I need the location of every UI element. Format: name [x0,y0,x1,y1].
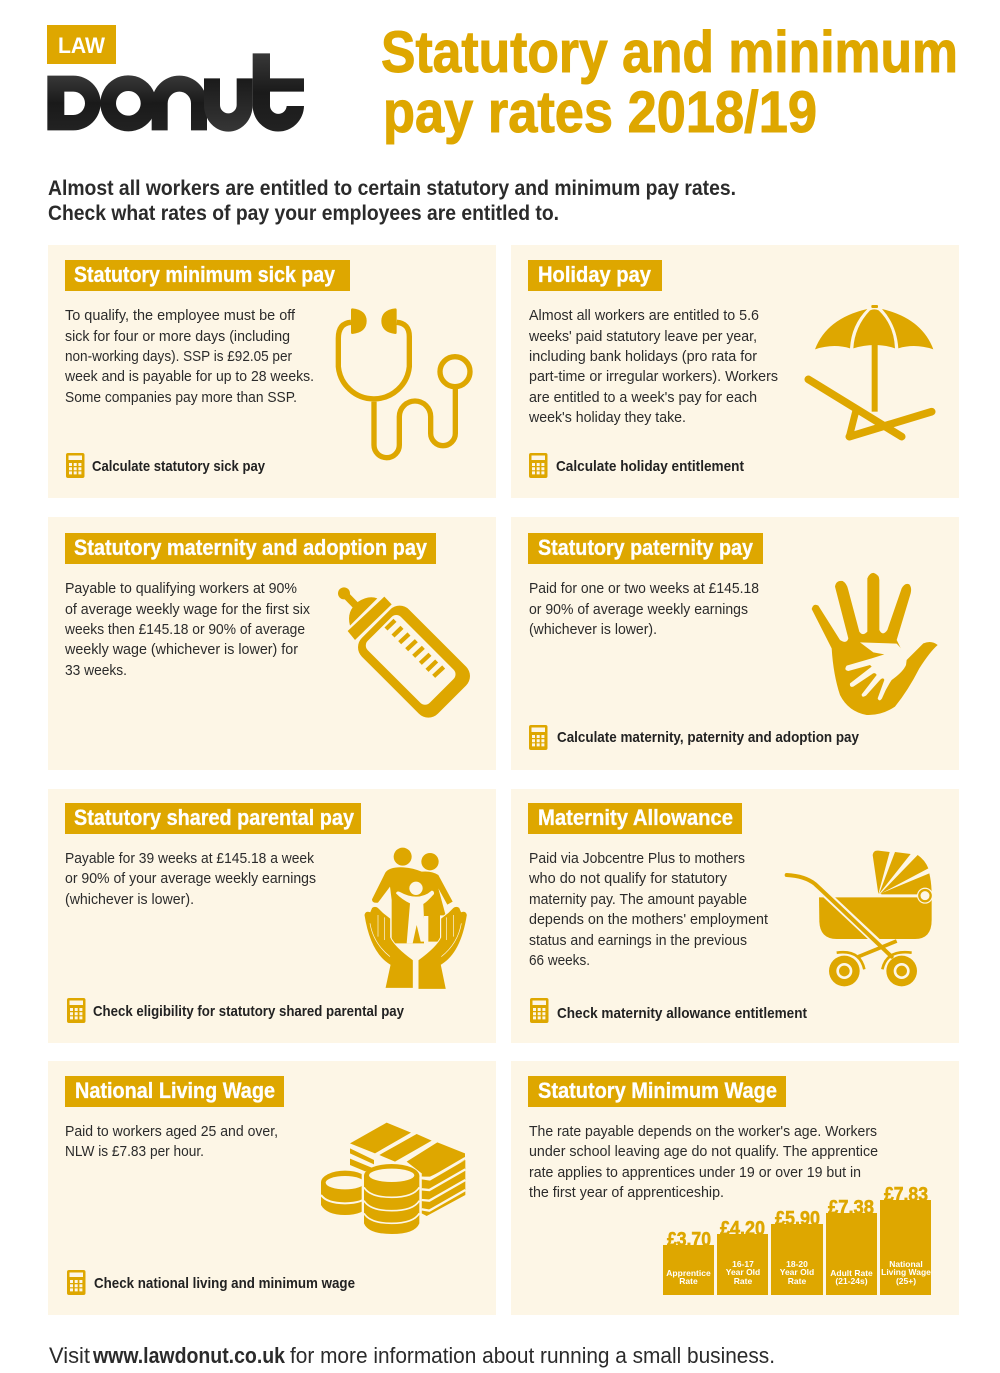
intro text: Check what rates of pay your employees are entitled to. [48,202,559,225]
body text: shared parental: Payable for 39 weeks at £145.18 a week [65,850,314,867]
body text: paternity: (whichever is lower). [529,621,657,638]
panel: maternity allowance [511,789,959,1043]
bar: 16-17 year old rate: Year Old [726,1267,760,1277]
logo: Law Donut: LAW [58,33,105,58]
bar: national living wage: National [889,1259,923,1269]
bar: adult rate: Adult Rate [830,1268,873,1278]
heading: paternity pay: Statutory paternity pay [538,535,754,560]
bar chart: wage rates [663,1184,931,1295]
body text: sick pay: week and is payable for up to 28 weeks. [64,368,314,385]
link: calculate holiday entitlement: Calculate holiday entitlement [556,458,744,475]
bar: national living wage [880,1184,931,1295]
body text: paternity: or 90% of average weekly earnings [529,601,748,618]
bar: national living wage: £7.83 [884,1184,928,1206]
body text: maternity: of average weekly wage for the first six [65,601,310,618]
heading: maternity and adoption pay: Statutory maternity and adoption pay [74,535,428,560]
body text: maternity: 33 weeks. [65,662,127,679]
body text: paternity: Paid for one or two weeks at £145.18 [529,580,759,597]
body text: statutory minimum wage: rate applies to apprentices under 19 or over 19 but in [529,1164,861,1181]
body text: sick pay: non-working days). SSP is £92.05 per [65,348,292,365]
panel: national living wage [48,1061,496,1315]
intro text: Almost all workers are entitled to certain statutory and minimum pay rates. [48,177,736,200]
icon: calculator [67,998,86,1023]
body text: maternity allowance: depends on the mothers' employment [529,911,769,928]
icon: stethoscope [338,308,470,458]
body text: statutory minimum wage: The rate payable depends on the worker's age. Workers [529,1123,877,1140]
footer text: Visit [49,1343,90,1368]
body text: national living wage [65,1123,278,1160]
panel: statutory minimum sick pay [48,245,496,498]
body text: holiday pay [528,307,778,426]
body text: maternity: Payable to qualifying workers at 90% [65,580,297,597]
heading: statutory minimum sick pay: Statutory minimum sick pay [74,262,336,287]
icon: family in cupped hands [364,848,467,989]
bar: 16-17 year old rate: £4.20 [720,1218,765,1240]
body text: statutory minimum wage [529,1123,878,1201]
icon: parent and child hands [812,573,938,715]
body text: holiday pay: weeks' paid statutory leave per year, [528,328,757,345]
bar: 18-20 year old rate: £5.90 [775,1208,820,1230]
bar: 18-20 year old rate: 18-20 [786,1259,808,1269]
bar: national living wage: Living Wage [881,1267,931,1277]
icon: beach umbrella and lounger [808,305,933,437]
icon: calculator [67,1270,86,1295]
panel: statutory shared parental pay [48,789,496,1043]
panel: holiday pay [511,245,959,498]
icon: baby bottle [338,587,476,723]
footer text: www.lawdonut.co.uk [92,1343,286,1368]
intro text [48,177,736,225]
link: check maternity allowance: Check maternity allowance entitlement [557,1005,807,1022]
icon: calculator [529,453,548,478]
icon: baby pram [787,851,933,986]
body text: holiday pay: week's holiday they take. [528,409,686,426]
body text: holiday pay: Almost all workers are entitled to 5.6 [529,307,759,324]
body text: holiday pay: part-time or irregular workers). Workers [529,368,778,385]
title [381,20,958,145]
body text: holiday pay: including bank holidays (pro rata for [529,348,757,365]
bar: adult rate: £7.38 [828,1197,874,1219]
icon: calculator [530,998,548,1023]
heading: maternity allowance: Maternity Allowance [538,805,733,830]
bar: apprentice rate: £3.70 [667,1229,711,1251]
bar: 18-20 year old rate: Rate [788,1276,806,1286]
body text: maternity allowance: who do not qualify for statutory [528,870,727,887]
bar: 16-17 year old rate [717,1218,768,1295]
body text: shared parental: or 90% of your average weekly earnings [65,870,316,887]
body text: sick pay [64,307,314,406]
logo: Law Donut [47,25,304,132]
body text: maternity allowance: maternity pay. The amount payable [529,891,747,908]
link: check eligibility: Check eligibility for statutory shared parental pay [93,1003,405,1020]
icon: banknotes and coins [321,1123,465,1234]
bar: 16-17 year old rate: Rate [734,1276,752,1286]
body text: paternity [529,580,759,638]
title: pay rates 2018/19 [383,80,817,145]
bar: apprentice rate: Rate [679,1276,698,1286]
body text: holiday pay: are entitled to a week's pay for each [529,389,757,406]
body text: shared parental [65,850,316,908]
body text: statutory minimum wage: under school leaving age do not qualify. The apprentice [529,1143,878,1160]
panel: statutory minimum wage [511,1061,959,1315]
body text: sick pay: To qualify, the employee must be off [65,307,296,324]
bar: 18-20 year old rate: Year Old [780,1267,814,1277]
body text: shared parental: (whichever is lower). [65,891,194,908]
heading: shared parental pay: Statutory shared parental pay [74,805,355,830]
heading: holiday pay: Holiday pay [538,262,652,287]
body text: maternity: weekly wage (whichever is lower) for [64,641,298,658]
body text: sick pay: Some companies pay more than SSP. [65,389,297,406]
body text: sick pay: sick for four or more days (including [65,328,290,345]
heading: national living wage: National Living Wage [75,1078,275,1103]
body text: national living wage: Paid to workers aged 25 and over, [65,1123,278,1140]
body text: maternity [64,580,310,679]
body text: maternity allowance: 66 weeks. [529,952,590,969]
bar: apprentice rate: Apprentice [666,1268,711,1278]
body text: maternity allowance: status and earnings in the previous [529,932,747,949]
bar: adult rate [826,1197,877,1295]
link: check national living and minimum wage: Check national living and minimum wage [94,1275,355,1292]
panel: statutory paternity pay [511,517,959,770]
link: calculate maternity, paternity and adoption pay: Calculate maternity, paternity and adoption pay [557,729,860,746]
heading: statutory minimum wage: Statutory Minimum Wage [538,1078,777,1103]
body text: statutory minimum wage: the first year of apprenticeship. [529,1184,724,1201]
link: calculate sick pay: Calculate statutory sick pay [92,458,266,475]
bar: 16-17 year old rate: 16-17 [732,1259,754,1269]
bar: national living wage: (25+) [896,1276,916,1286]
bar: apprentice rate [663,1229,714,1295]
body text: national living wage: NLW is £7.83 per hour. [65,1143,204,1160]
bar: adult rate: (21-24s) [835,1276,868,1286]
footer text [49,1343,775,1368]
body text: maternity allowance [528,850,769,969]
body text: maternity: weeks then £145.18 or 90% of average [64,621,305,638]
panel: statutory maternity and adoption pay [48,517,496,770]
icon: calculator [66,453,84,478]
footer text: for more information about running a small business. [290,1343,775,1368]
bar: 18-20 year old rate [771,1208,823,1295]
icon: calculator [529,725,548,750]
body text: maternity allowance: Paid via Jobcentre Plus to mothers [529,850,745,867]
